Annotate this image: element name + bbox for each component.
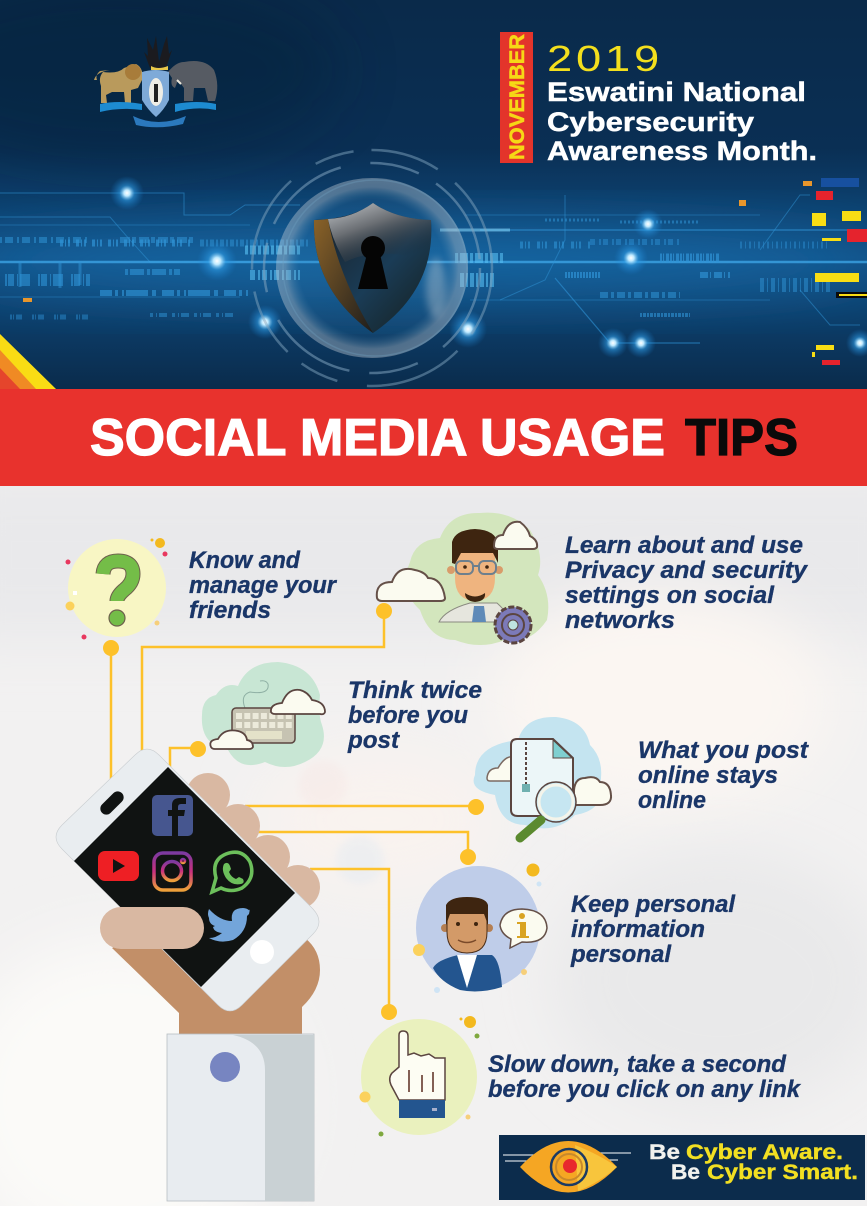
tip text: think twice: before you <box>348 702 468 729</box>
connector lines <box>111 611 476 1012</box>
header title: Cybersecurity <box>547 107 754 137</box>
tip text: think twice <box>347 677 482 754</box>
november tag: NOVEMBER <box>506 34 529 160</box>
phone screen <box>74 767 295 987</box>
title band: TIPS <box>685 409 798 467</box>
header banner <box>0 0 867 390</box>
thumb <box>100 907 204 949</box>
tip text: keep personal <box>570 891 736 968</box>
tip text: friends: friends <box>189 597 271 624</box>
footer badge: Cyber Smart. <box>707 1161 858 1184</box>
title band: SOCIAL MEDIA USAGE <box>90 409 665 467</box>
phone speaker <box>98 789 126 817</box>
connector dots <box>103 603 484 1020</box>
header title <box>547 38 817 166</box>
circuit pattern <box>0 193 867 343</box>
fingers <box>186 773 320 909</box>
tip text: privacy: settings on social <box>565 582 775 609</box>
icon: man with info bubble <box>413 864 547 993</box>
lens rings around shield <box>252 150 492 386</box>
tip text: slow down: before you click on any link <box>488 1076 802 1103</box>
phone home button <box>250 940 274 964</box>
tip text: keep personal: personal <box>570 941 672 968</box>
phone body <box>56 749 319 1011</box>
corner stripes <box>0 334 56 389</box>
icon: man with glasses and gear <box>377 513 548 645</box>
header title: 2019 <box>547 38 663 79</box>
header title: Eswatini National <box>547 77 806 107</box>
hand holding phone <box>56 749 320 1201</box>
tip text: think twice: post <box>347 727 400 754</box>
tip text: slow down <box>488 1051 802 1103</box>
tip text: friends <box>189 547 338 624</box>
icon: pointing hand <box>360 1016 480 1136</box>
tip text: keep personal: Keep personal <box>571 891 736 918</box>
footer badge: Be <box>671 1161 700 1184</box>
page background <box>0 470 867 1206</box>
sleeve cuff <box>167 1034 314 1201</box>
icon: cyber eye <box>503 1141 631 1192</box>
tip text: stays online: online stays <box>638 762 778 789</box>
icon: keyboard <box>202 662 325 767</box>
footer badge: Cyber Aware. <box>686 1141 843 1164</box>
tip text: privacy <box>565 532 809 634</box>
tip text: privacy: networks <box>565 607 675 634</box>
tip text: privacy: Learn about and use <box>565 532 803 559</box>
tip text: friends: manage your <box>189 572 338 599</box>
palm and wrist <box>112 900 320 1036</box>
footer badge <box>499 1135 865 1200</box>
tip text: think twice: Think twice <box>348 677 482 704</box>
header title: Awareness Month. <box>547 136 817 166</box>
tip text: friends: Know and <box>189 547 301 574</box>
tip text: stays online: What you post <box>638 737 809 764</box>
tip text: stays online <box>638 737 809 814</box>
title band <box>0 389 867 486</box>
icon: facebook <box>152 795 193 836</box>
tip text: keep personal: information <box>571 916 705 943</box>
icon: shield with keyhole <box>314 203 446 333</box>
tip text: privacy: Privacy and security <box>565 557 809 584</box>
glow lights <box>110 176 867 358</box>
footer badge: Be <box>649 1141 680 1164</box>
icon: question mark <box>66 538 168 640</box>
icon: coat of arms <box>94 36 217 127</box>
icon: twitter <box>208 908 250 942</box>
icon: whatsapp <box>212 852 252 892</box>
icon: instagram <box>154 853 191 890</box>
icon: document with magnifier <box>474 717 611 838</box>
icon: youtube <box>98 851 139 881</box>
coloured data blocks <box>23 178 867 365</box>
tip text: stays online: online <box>638 787 706 814</box>
november tag <box>500 32 533 163</box>
tip text: slow down: Slow down, take a second <box>488 1051 787 1078</box>
